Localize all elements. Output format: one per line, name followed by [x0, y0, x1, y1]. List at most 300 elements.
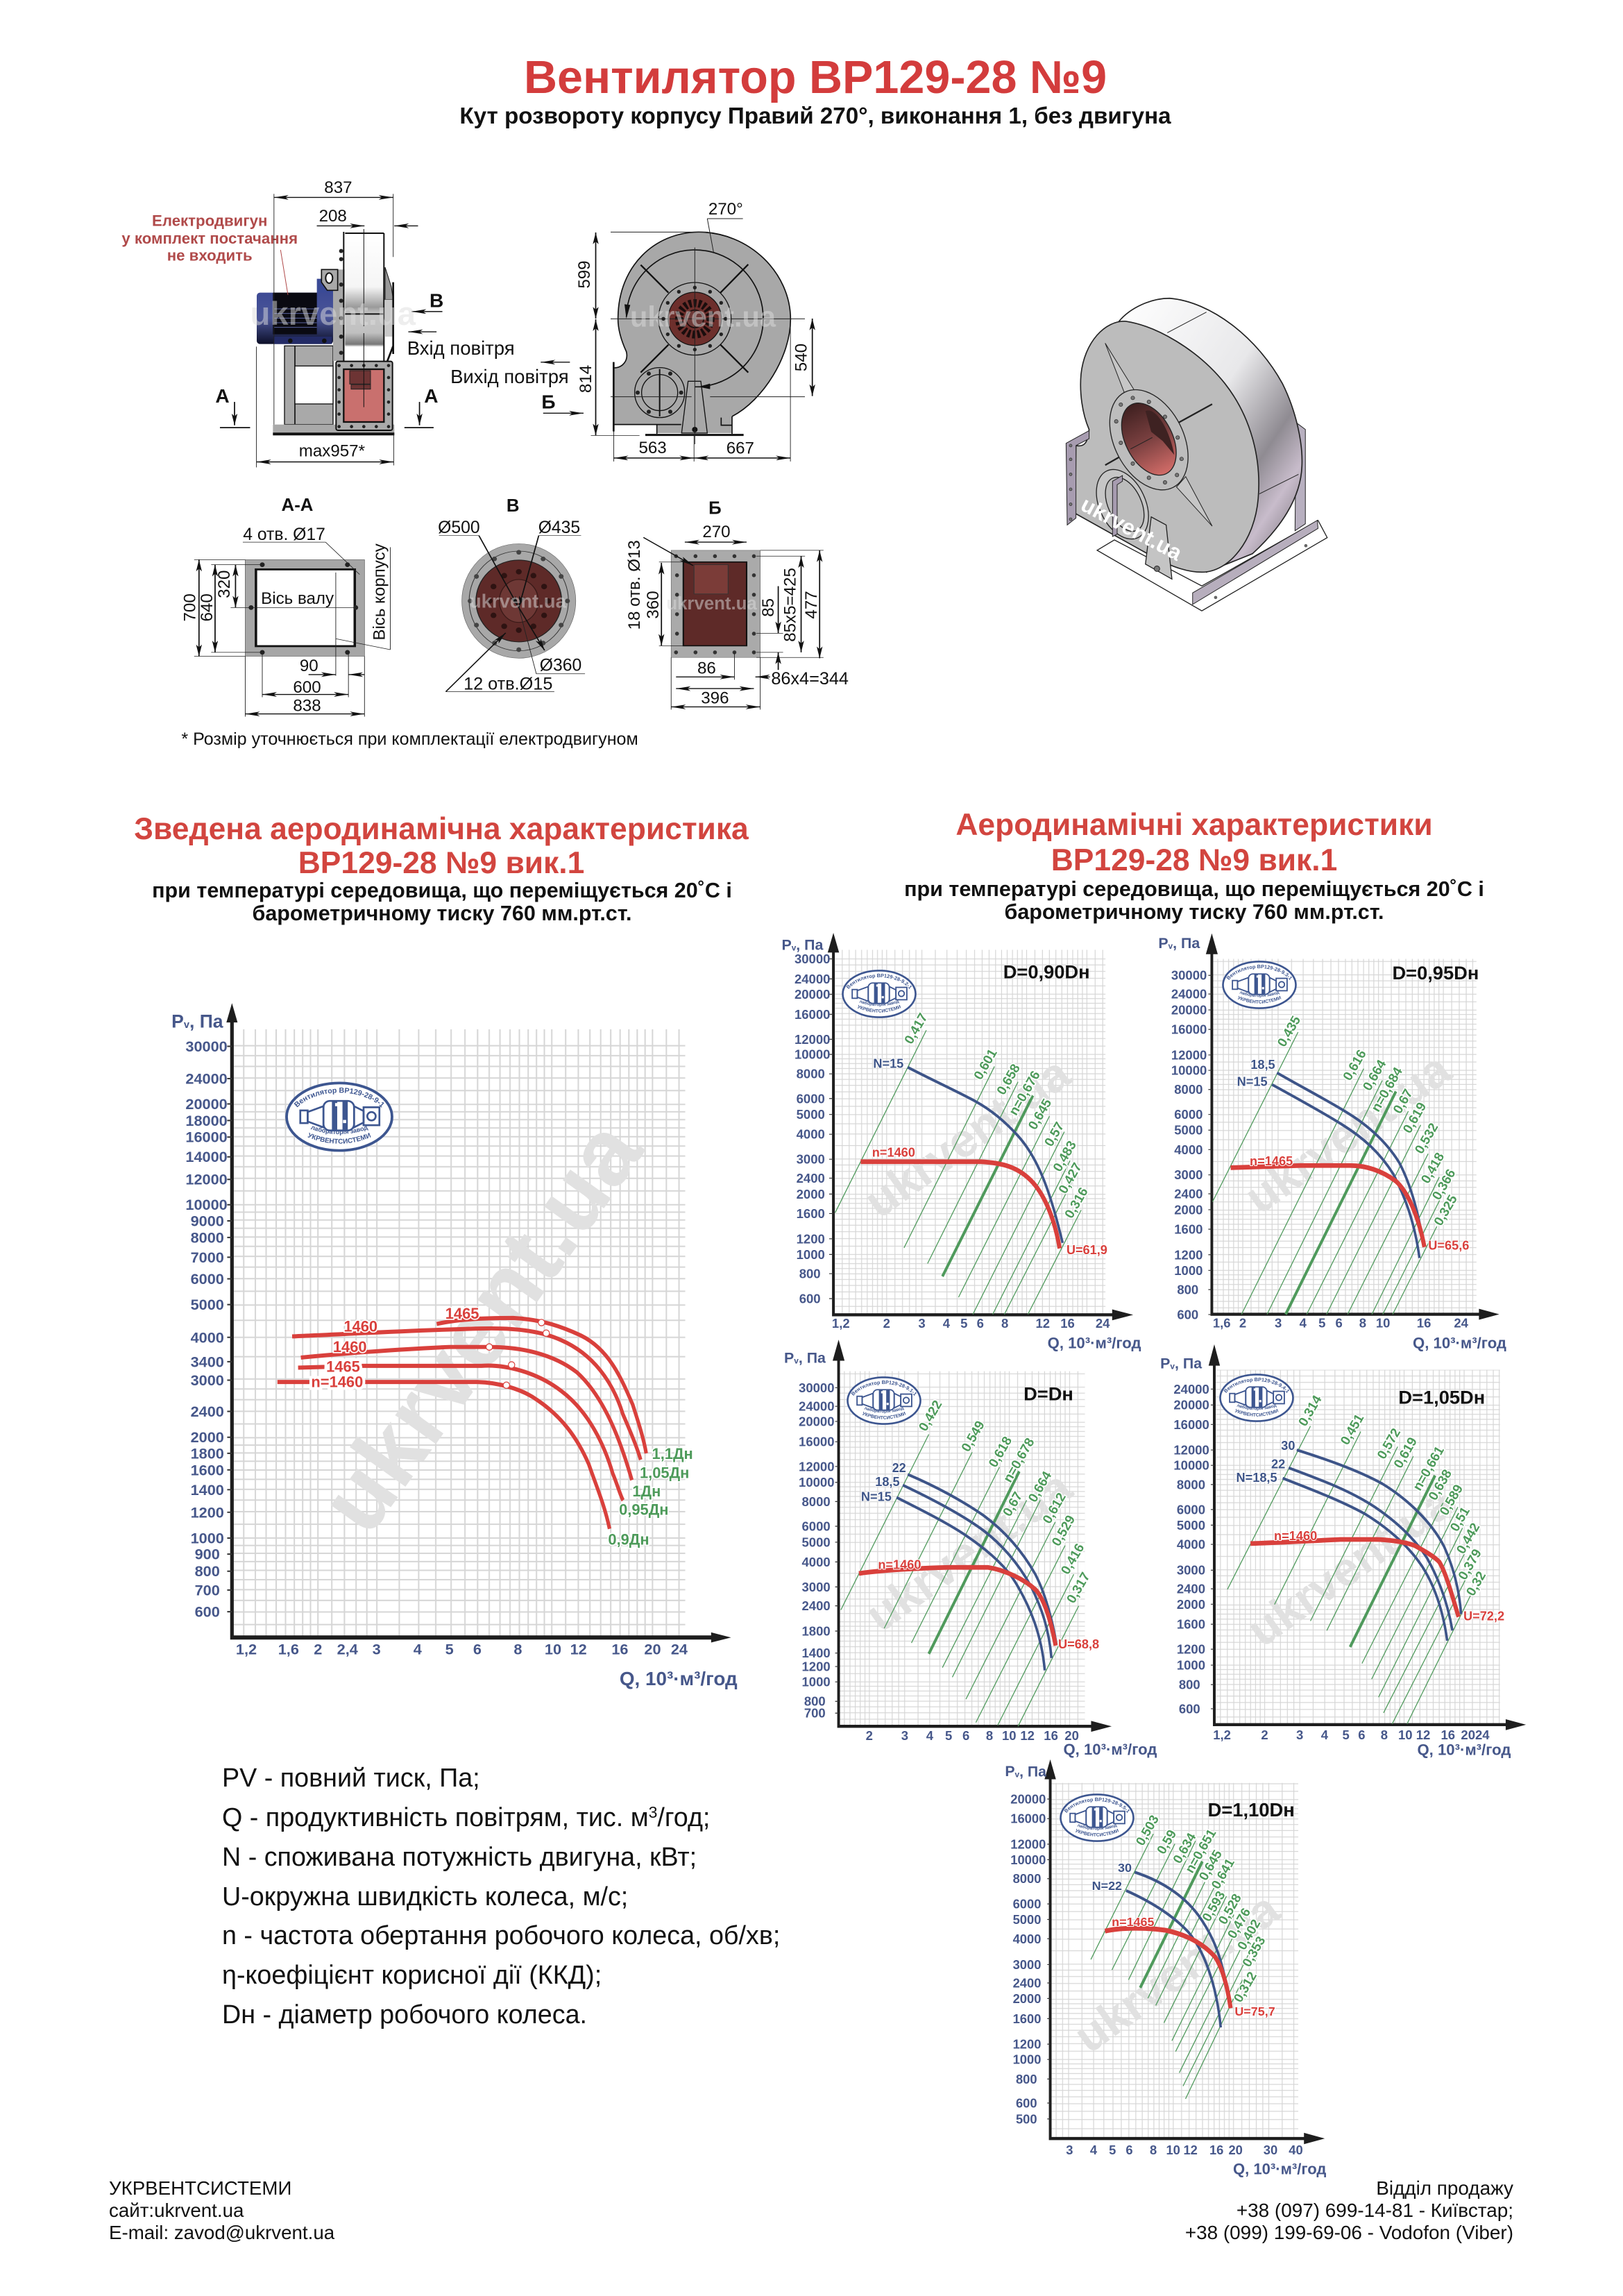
x axis labels: 12 [1183, 2143, 1198, 2157]
efficiency lines [1091, 1834, 1250, 2099]
efficiency lines [835, 1030, 1081, 1315]
y axis labels: 1000 [1177, 1658, 1205, 1673]
callout: motor not included [121, 212, 298, 264]
y axis labels: 1200 [1013, 2037, 1041, 2052]
view Б outlet: 86 [697, 659, 716, 677]
x axis labels: 8 [1359, 1316, 1366, 1331]
y axis labels: 2400 [1013, 1975, 1041, 1990]
heading: summary aerodynamic characteristic [134, 812, 749, 880]
diameter label: D=0,90Dн [1003, 961, 1090, 983]
axis title: pressure: v [1015, 1770, 1020, 1780]
optimal efficiency line [929, 1471, 1019, 1654]
footer: company contacts: УКРВЕНТСИСТЕМИ [109, 2177, 291, 2199]
y axis labels: 5000 [1174, 1123, 1203, 1138]
y axis labels: 16000 [799, 1435, 835, 1449]
x axis labels: 40 [1289, 2143, 1303, 2157]
y axis labels: 4000 [1174, 1142, 1203, 1157]
efficiency labels: 0,612 [1040, 1490, 1069, 1526]
curve labels: U=72,2 [1463, 1609, 1504, 1623]
heading: summary aerodynamic characteristic: Зведена аеродинамічна характеристика [134, 812, 749, 846]
y axis labels: 2400 [1174, 1186, 1203, 1201]
panel: chart D=0,95Dн [1158, 933, 1506, 1380]
x axis labels: 12 [1416, 1728, 1430, 1742]
efficiency labels [916, 1398, 1094, 1606]
y axis labels: 1800 [801, 1624, 831, 1639]
x axis labels: 16 [1060, 1316, 1075, 1331]
y axis labels: 10000 [794, 1047, 830, 1062]
x axis labels [832, 1316, 1110, 1331]
y axis labels: 1200 [801, 1660, 831, 1674]
efficiency labels: 0,593 [1199, 1889, 1228, 1924]
power curve [908, 1067, 1062, 1243]
x axis labels: 10 [1002, 1728, 1017, 1743]
y axis labels: 10000 [799, 1475, 835, 1489]
legend: 3 [649, 1803, 657, 1821]
y axis labels [1173, 1382, 1209, 1716]
y axis labels: 10000 [1171, 1063, 1207, 1078]
x axis labels: 2 [866, 1728, 873, 1743]
view B inlet: Ø500 [438, 518, 480, 537]
efficiency labels: 0,664 [1360, 1057, 1390, 1093]
section A-A: 320 [215, 571, 234, 598]
panel: chart D=0,90Dн [781, 933, 1141, 1380]
heading: aerodynamic characteristics [955, 808, 1433, 877]
legend: /год; [657, 1803, 710, 1832]
y axis labels: 16000 [1010, 1812, 1046, 1826]
view B inlet [438, 496, 585, 693]
x axis labels: 3 [1066, 2143, 1073, 2157]
legend: n - частота обертання робочого колеса, об/хв; [222, 1921, 780, 1950]
x axis labels: 24 [1454, 1316, 1469, 1331]
x axis labels: 6 [1335, 1316, 1343, 1331]
x axis labels: 1,6 [1213, 1316, 1231, 1331]
x axis labels [1213, 1728, 1490, 1742]
x axis labels: 10 [545, 1640, 561, 1657]
x axis labels: 8 [986, 1728, 993, 1743]
front view dimensions: 270° [708, 200, 743, 219]
y axis labels: 800 [195, 1562, 220, 1580]
diameter labels: 1,05Дн [640, 1464, 689, 1481]
y axis labels: 10000 [1173, 1458, 1209, 1473]
y axis labels: 800 [799, 1267, 821, 1281]
x axis labels: 5 [960, 1316, 967, 1331]
x axis labels: 3 [918, 1316, 926, 1331]
y axis labels: 2000 [797, 1187, 825, 1201]
legend: η-коефіцієнт корисної дії (ККД); [222, 1960, 602, 1989]
icon: laboratory stamp: лабораторія завод [859, 1000, 899, 1007]
axis title: pressure: P [1158, 935, 1169, 952]
y axis labels: 2000 [1174, 1202, 1203, 1217]
y axis labels: 2000 [1177, 1597, 1205, 1612]
x axis labels: 3 [373, 1640, 381, 1657]
y axis labels: 1600 [1013, 2011, 1041, 2026]
diameter labels: 1Дн [632, 1483, 661, 1500]
x axis labels: 6 [962, 1728, 969, 1743]
y axis labels: 9000 [191, 1212, 224, 1229]
section A-A: 640 [198, 593, 216, 622]
y axis labels [799, 1381, 835, 1721]
axis title: flow: Q, 10³·м³/год [1048, 1335, 1141, 1352]
view Б outlet: 85 [759, 598, 778, 617]
y axis labels: 20000 [1010, 1792, 1046, 1807]
view B inlet: Ø360 [540, 656, 581, 675]
axis title: pressure: , Па [1175, 1356, 1202, 1372]
view Б outlet: 86x4=344 [771, 669, 849, 689]
y axis labels: 800 [804, 1694, 826, 1709]
diameter labels: 0,9Дн [608, 1530, 649, 1548]
x axis labels: 20 [1228, 2143, 1243, 2157]
x axis labels: 24 [1096, 1316, 1110, 1331]
curve labels: 22 [892, 1461, 906, 1475]
x axis labels: 10 [1166, 2143, 1180, 2157]
efficiency labels: 0,416 [1058, 1542, 1087, 1577]
y axis labels: 16000 [185, 1129, 228, 1146]
panel: chart D=1,05Dн: ukrvent.ua [1238, 1475, 1463, 1657]
legend: Dн - діаметр робочого колеса. [222, 2000, 587, 2029]
x axis labels: 8 [513, 1640, 522, 1657]
legend: PV - повний тиск, Па; [222, 1763, 480, 1792]
axis title: pressure: v [1170, 1361, 1175, 1371]
efficiency labels: 0,589 [1437, 1483, 1466, 1518]
x axis labels: 12 [1020, 1728, 1035, 1743]
efficiency labels: n=0,676 [1006, 1069, 1044, 1118]
pressure curve [1231, 1165, 1425, 1247]
x axis labels: 8 [1381, 1728, 1388, 1742]
front view dimensions: 814 [577, 365, 595, 393]
x axis labels: 4 [926, 1728, 934, 1743]
x axis labels: 16 [1417, 1316, 1431, 1331]
efficiency labels: 0,427 [1056, 1160, 1085, 1197]
y axis labels: 8000 [1177, 1477, 1205, 1492]
icon: laboratory stamp: Вентилятор ВР129-28-9.5-1 [1064, 1798, 1130, 1813]
y axis labels: 1000 [801, 1675, 831, 1689]
y axis labels: 6000 [1013, 1897, 1041, 1911]
y axis labels: 18000 [185, 1112, 228, 1129]
x axis labels: 16 [611, 1640, 628, 1657]
y axis labels: 8000 [191, 1229, 224, 1246]
subtitle: Кут розвороту корпусу Правий 270°, виконання 1, без двигуна [459, 103, 1171, 129]
side view dimensions: В [430, 290, 443, 312]
y axis labels: 7000 [191, 1249, 224, 1266]
y axis labels: 600 [799, 1292, 821, 1306]
section A-A [181, 496, 390, 717]
efficiency labels: 0,325 [1431, 1192, 1461, 1229]
efficiency labels [1275, 1013, 1461, 1229]
diameter labels [608, 1445, 693, 1548]
x axis labels: 20 [1064, 1728, 1079, 1743]
efficiency lines [841, 1435, 1079, 1726]
optimal efficiency line [1286, 1091, 1396, 1315]
max efficiency points [486, 1319, 550, 1388]
optimal efficiency line [1350, 1476, 1435, 1647]
axis title: pressure: P [1005, 1764, 1015, 1780]
y axis labels: 1000 [1013, 2052, 1041, 2067]
efficiency labels: 0,549 [959, 1419, 988, 1454]
y axis labels: 20000 [794, 987, 830, 1002]
efficiency labels: 0,57 [1042, 1120, 1067, 1149]
panel: chart D=1,10Dн [1005, 1759, 1326, 2178]
callout: motor not included: Електродвигун [152, 212, 267, 230]
diameter label: D=1,05Dн [1398, 1387, 1485, 1408]
pressure curve [1105, 1928, 1231, 2008]
x axis labels: 30 [1264, 2143, 1277, 2157]
efficiency labels: 0,618 [986, 1434, 1015, 1470]
x axis labels [1213, 1316, 1469, 1331]
axis title: flow: Q, 10³·м³/год [1417, 1741, 1511, 1759]
y axis labels: 5000 [1177, 1518, 1205, 1533]
icon: laboratory stamp: УКРВЕНТСИСТЕМИ [1238, 995, 1281, 1004]
optimal efficiency line [942, 1095, 1033, 1276]
view Б outlet: 396 [701, 689, 729, 708]
y axis labels [794, 952, 830, 1306]
y axis labels: 24000 [185, 1070, 228, 1087]
red pressure curves [278, 1318, 646, 1529]
title: Вентилятор ВР129-28 №9 [524, 52, 1107, 103]
x axis labels: 10 [1398, 1728, 1413, 1742]
curve labels: N=15 [861, 1489, 892, 1503]
y axis labels: 12000 [794, 1032, 830, 1047]
icon: laboratory stamp: УКРВЕНТСИСТЕМИ [307, 1133, 371, 1144]
y axis labels: 3000 [797, 1152, 825, 1167]
power curves [1272, 1073, 1424, 1258]
legend [222, 1763, 780, 2029]
text block: characteristics conditions: барометричному тиску 760 мм.рт.ст. [1004, 900, 1384, 924]
curve labels [1237, 1058, 1469, 1253]
y axis labels: 2400 [1177, 1582, 1205, 1596]
x axis labels [866, 1728, 1079, 1743]
side view dimensions: max957* [299, 441, 366, 460]
curve labels: n=1460 [872, 1145, 915, 1159]
y axis labels: 700 [195, 1581, 220, 1598]
axis title: pressure: P [784, 1350, 794, 1367]
efficiency labels: 0,645 [1196, 1848, 1225, 1883]
rotation speed labels: 1460 [333, 1338, 367, 1356]
curve labels: n=1465 [1112, 1915, 1155, 1929]
y axis labels: 10000 [1010, 1852, 1046, 1867]
pressure curve [860, 1162, 1060, 1249]
footer: sales department: +38 (099) 199-69-06 - Vodofon (Viber) [1185, 2222, 1513, 2243]
y axis labels: 1200 [1174, 1247, 1203, 1262]
icon: isometric fan render [1066, 298, 1327, 611]
curve labels: N=15 [873, 1057, 903, 1071]
icon: laboratory stamp: Вентилятор ВР129-28-9-1 [294, 1088, 384, 1108]
axis title: pressure: v [1169, 941, 1173, 951]
y axis labels: 16000 [794, 1007, 830, 1022]
watermarks on drawings: ukrvent.ua [250, 295, 416, 332]
y axis labels: 5000 [1013, 1912, 1041, 1927]
y axis labels: 3000 [801, 1580, 831, 1594]
icon: laboratory stamp: УКРВЕНТСИСТЕМИ [1235, 1409, 1278, 1417]
y axis labels: 1000 [1174, 1263, 1203, 1278]
efficiency labels: 0,314 [1296, 1393, 1325, 1429]
x axis labels: 6 [977, 1316, 984, 1331]
icon: laboratory stamp [1060, 1793, 1135, 1842]
y axis labels: 800 [1016, 2072, 1037, 2086]
text block: summary conditions: при температурі середовища, що переміщується 20˚С і [152, 879, 732, 902]
x axis labels: 2 [1239, 1316, 1246, 1331]
y axis labels: 1600 [797, 1206, 825, 1221]
axis title: pressure: , Па [799, 1350, 826, 1367]
section A-A: Вісь корпусу [371, 543, 389, 641]
efficiency labels: 0,529 [1049, 1513, 1078, 1549]
pressure curve [859, 1567, 1055, 1646]
axis title: flow: Q, 10³·м³/год [1063, 1741, 1157, 1758]
view Б outlet: 477 [802, 591, 821, 619]
footnote: * Розмір уточнюється при комплектації електродвигуном [181, 729, 638, 749]
curve labels: U=75,7 [1234, 2004, 1275, 2018]
curve labels: n=1460 [1274, 1529, 1317, 1543]
efficiency labels: 0,638 [1426, 1467, 1455, 1503]
panel: summary chart: ukrvent.ua [298, 1100, 662, 1551]
front view dimensions: 599 [575, 260, 594, 289]
section A-A: 4 отв. Ø17 [243, 525, 325, 544]
icon: laboratory stamp [1222, 961, 1297, 1009]
y axis labels: 600 [1179, 1701, 1200, 1716]
y axis labels: 14000 [185, 1148, 228, 1165]
axis title: pressure: P [171, 1011, 184, 1032]
footer: sales department [1185, 2177, 1513, 2243]
efficiency labels: 0,572 [1375, 1426, 1404, 1462]
panel: chart D=Dн: ukrvent.ua [856, 1460, 1082, 1641]
y axis labels: 2400 [191, 1403, 224, 1420]
efficiency labels: 0,476 [1224, 1905, 1253, 1941]
icon: laboratory stamp: Вентилятор ВР129-28-9.4-1 [1224, 1377, 1289, 1394]
y axis labels: 30000 [185, 1038, 228, 1055]
axis title: flow: Q, 10³·м³/год [620, 1668, 738, 1689]
efficiency labels: 0,483 [1051, 1138, 1080, 1174]
y axis labels: 6000 [801, 1519, 831, 1533]
y axis labels: 20000 [1173, 1398, 1209, 1412]
x axis labels: 24 [671, 1640, 688, 1657]
heading: summary aerodynamic characteristic: ВР129-28 №9 вик.1 [298, 846, 584, 880]
x axis labels: 2,4 [337, 1640, 358, 1657]
y axis labels: 24000 [1171, 987, 1207, 1002]
panel: chart D=1,05Dн [1160, 1344, 1527, 1759]
efficiency labels: n=0,661 [1411, 1444, 1447, 1494]
legend: U-окружна швидкість колеса, м/с; [222, 1882, 628, 1911]
icon: laboratory stamp: лабораторія завод [1239, 991, 1280, 998]
footer: company contacts: E-mail: zavod@ukrvent.ua [109, 2222, 335, 2243]
y axis labels: 4000 [191, 1328, 224, 1346]
efficiency labels: 0,32 [1463, 1569, 1489, 1598]
callout: motor not included: не входить [167, 247, 253, 264]
y axis labels: 16000 [1171, 1022, 1207, 1037]
y axis labels: 1200 [191, 1503, 224, 1521]
curve labels: U=65,6 [1428, 1239, 1469, 1253]
icon: laboratory stamp: Вентилятор ВР129-28-9.2-1 [847, 973, 912, 990]
efficiency labels: n=0,651 [1182, 1826, 1218, 1875]
front view drawing [611, 219, 805, 444]
efficiency labels: 0,418 [1418, 1150, 1447, 1186]
y axis labels: 20000 [1171, 1003, 1207, 1018]
y axis labels: 6000 [1177, 1502, 1205, 1517]
x axis labels: 16 [1209, 2143, 1223, 2157]
axis title: pressure: , Па [1019, 1764, 1046, 1780]
curve labels: N=22 [1092, 1879, 1122, 1893]
x axis labels: 4 [1300, 1316, 1307, 1331]
footer: sales department: Відділ продажу [1376, 2177, 1513, 2199]
y axis labels: 1400 [801, 1646, 831, 1660]
section A-A: 90 [300, 657, 318, 675]
view Б outlet: 360 [644, 591, 663, 619]
y axis labels: 24000 [1173, 1382, 1209, 1396]
y axis labels: 500 [1016, 2111, 1037, 2126]
icon: laboratory stamp: лабораторія завод [1237, 1404, 1277, 1411]
icon: laboratory stamp [1219, 1374, 1294, 1422]
front view dimensions: 563 [638, 439, 667, 457]
footer: sales department: +38 (097) 699-14-81 - Київстар; [1237, 2200, 1513, 2221]
y axis labels: 24000 [799, 1399, 835, 1414]
efficiency labels: 0,422 [916, 1398, 945, 1434]
curve labels [1092, 1861, 1275, 2018]
rotation speed labels: n=1460 [311, 1374, 363, 1391]
section A-A: 600 [293, 678, 321, 697]
side view dimensions: 837 [324, 178, 352, 197]
view Б outlet: Б [708, 498, 722, 518]
axis title: flow: Q, 10³·м³/год [1413, 1335, 1506, 1352]
efficiency lines [1212, 1032, 1443, 1315]
x axis labels: 2024 [1461, 1728, 1490, 1742]
y axis labels: 1600 [1174, 1222, 1203, 1236]
x axis labels: 3 [901, 1728, 908, 1743]
diameter labels: 1,1Дн [652, 1445, 693, 1462]
icon: laboratory stamp: Вентилятор ВР129-28-9.3-1 [1227, 965, 1292, 980]
curve labels: n=1465 [1250, 1154, 1293, 1168]
x axis labels: 4 [1090, 2143, 1098, 2157]
y axis labels: 3000 [191, 1371, 224, 1389]
curve labels: 30 [1281, 1439, 1295, 1453]
efficiency labels: n=0,684 [1369, 1065, 1406, 1115]
axis title: pressure: , Па [1173, 935, 1200, 952]
text block: characteristics conditions: при температурі середовища, що переміщується 20˚С і [904, 877, 1484, 901]
x axis labels: 16 [1441, 1728, 1455, 1742]
efficiency labels: 0,417 [902, 1011, 931, 1047]
efficiency labels: 0,402 [1234, 1917, 1263, 1952]
panel: chart D=0,95Dн: ukrvent.ua [1235, 1042, 1461, 1224]
axis title: pressure: , Па [796, 937, 823, 954]
rotation speed labels: 1460 [343, 1317, 377, 1335]
y axis labels: 600 [195, 1603, 220, 1621]
drawing annotations [121, 178, 849, 749]
curve labels: U=61,9 [1067, 1243, 1107, 1257]
optimal efficiency line [1140, 1862, 1203, 1988]
side view dimensions [215, 178, 584, 467]
icon: laboratory stamp: УКРВЕНТСИСТЕМИ [1076, 1828, 1119, 1837]
icon: laboratory stamp [842, 970, 917, 1018]
x axis labels: 10 [1376, 1316, 1390, 1331]
x axis labels: 2 [883, 1316, 890, 1331]
y axis labels: 20000 [799, 1414, 835, 1428]
front view dimensions: 540 [792, 344, 811, 371]
efficiency labels: 0,619 [1400, 1100, 1429, 1136]
x axis labels: 6 [473, 1640, 482, 1657]
view B inlet: Ø435 [538, 518, 580, 537]
y axis labels: 8000 [1174, 1082, 1203, 1097]
icon: laboratory stamp: УКРВЕНТСИСТЕМИ [862, 1412, 906, 1419]
efficiency labels: 0,366 [1429, 1167, 1459, 1203]
efficiency labels: 0,532 [1412, 1121, 1441, 1156]
power curves [897, 1474, 1056, 1671]
efficiency labels: 0,641 [1208, 1856, 1237, 1891]
y axis labels: 6000 [797, 1091, 825, 1106]
y axis labels: 3400 [191, 1353, 224, 1370]
efficiency labels: 0,353 [1239, 1934, 1268, 1969]
y axis labels: 2000 [1013, 1991, 1041, 2006]
efficiency labels: 0,67 [1391, 1087, 1416, 1116]
side view dimensions: 208 [319, 207, 347, 226]
y axis labels: 1600 [1177, 1617, 1205, 1632]
y axis labels: 8000 [1013, 1871, 1041, 1886]
